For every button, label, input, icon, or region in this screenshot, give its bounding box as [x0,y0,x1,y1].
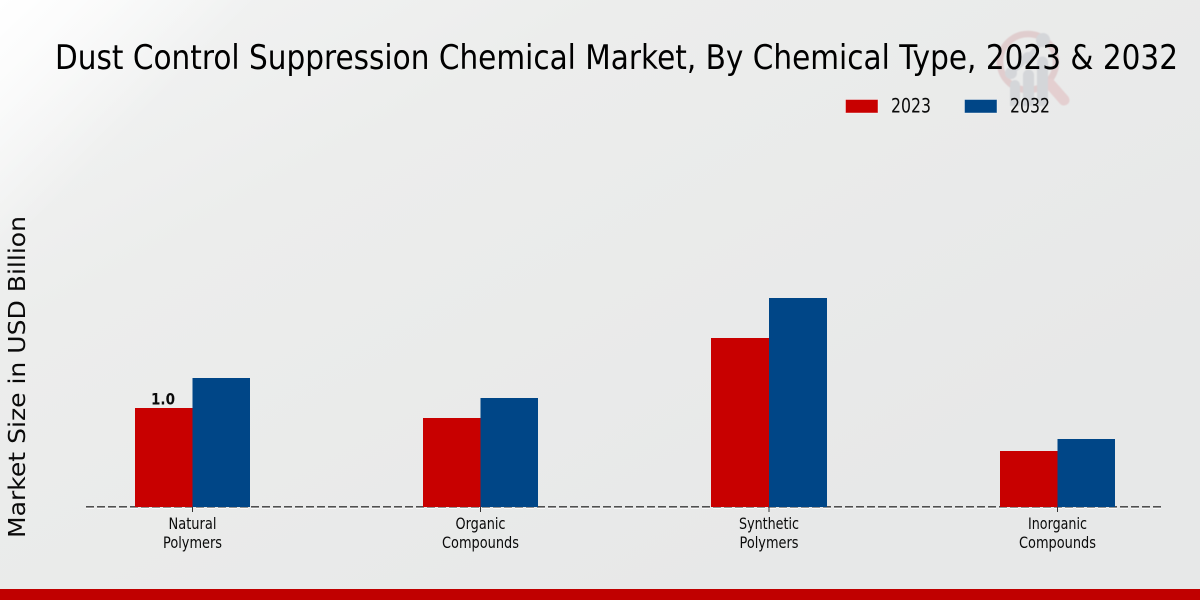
axis label: Synthetic Polymers [739,514,799,552]
axis label: Inorganic Compounds: Compounds [1019,533,1096,552]
legend [846,94,1050,118]
footer bar [0,589,1200,600]
axis label: Synthetic Polymers: Polymers [740,533,798,552]
axis label: Natural Polymers [163,514,222,552]
group: Natural Polymers [135,378,250,507]
y axis title: Market Size in USD Billion [5,216,31,538]
group: Organic Compounds [423,398,538,507]
axis label: Organic Compounds: Organic [456,514,506,533]
axis label: Organic Compounds: Compounds [442,533,519,552]
axis label: Organic Compounds [442,514,519,552]
group: Inorganic Compounds [1000,439,1115,507]
legend swatch: 2032 [964,100,997,113]
axis label: Inorganic Compounds: Inorganic [1028,514,1087,533]
axis label: Natural Polymers: Polymers [163,533,222,552]
legend swatch: 2023 [846,100,878,113]
axis label: Natural Polymers: Natural [168,514,216,533]
icon: watermark logo [1000,33,1064,106]
value label: 1.0 [151,389,175,408]
axis label: Inorganic Compounds [1019,514,1096,552]
axis label: Synthetic Polymers: Synthetic [739,514,799,533]
group: Synthetic Polymers [711,298,827,507]
legend label: 2023: 2023 [891,94,931,118]
bar chart [86,298,1164,512]
legend label: 2032: 2032 [1010,94,1050,118]
